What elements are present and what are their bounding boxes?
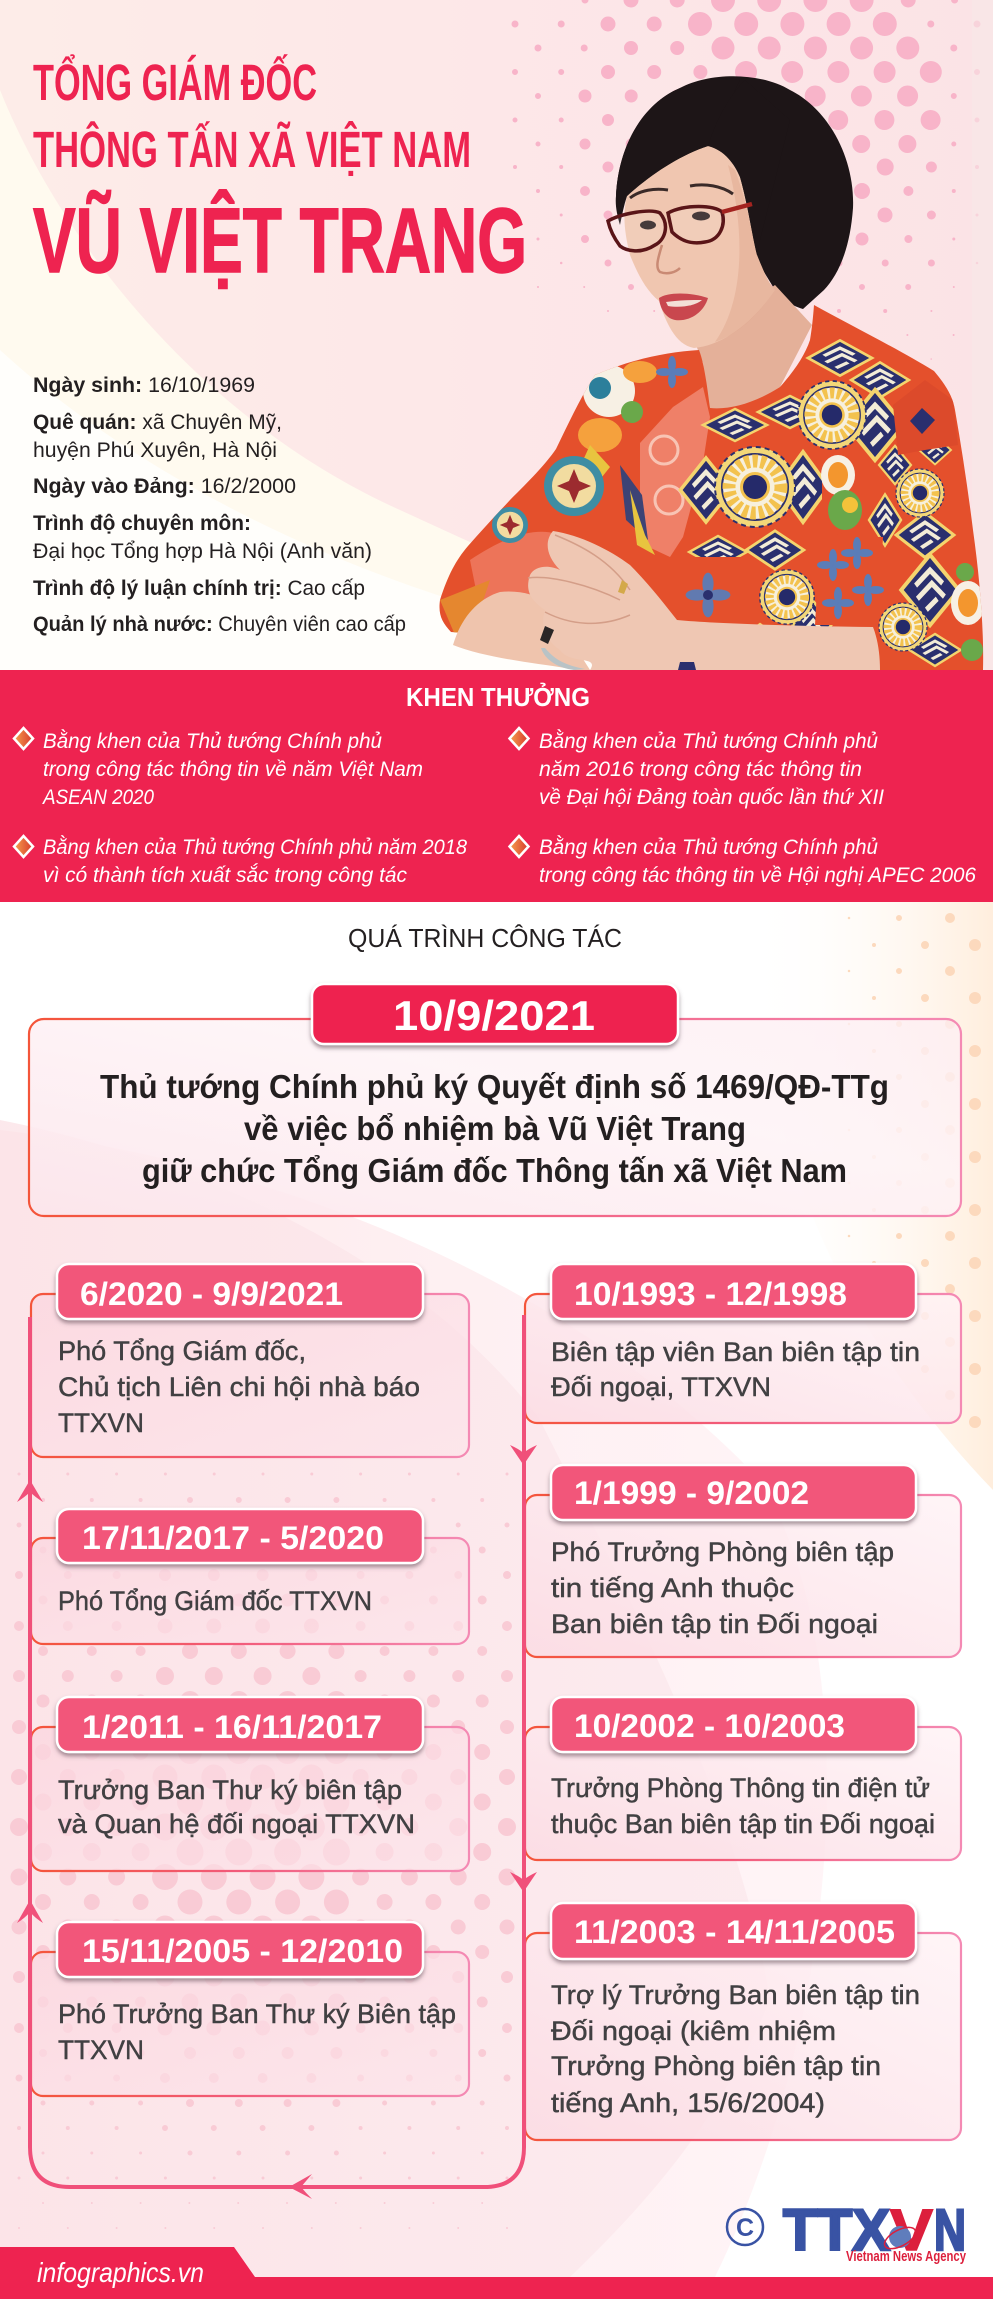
footer band: [0, 2247, 993, 2299]
decorative dots: timeline halftone: [19, 1474, 510, 2228]
panel: timeline left 3: và Quan hệ đối ngoại TTXVN: [58, 1809, 415, 1839]
logo: ttxvn: V: [890, 2198, 933, 2263]
navy and yellow diamond field: [703, 409, 767, 441]
milestone text: Thủ tướng Chính phủ ký Quyết định số 1469/QĐ-TTg: [100, 1068, 889, 1105]
panel: timeline left 3: [31, 1697, 469, 1871]
panel: timeline right 3: 10/2002 - 10/2003: [574, 1708, 845, 1744]
nose: [657, 245, 680, 273]
panel: timeline left 4: TTXVN: [58, 2035, 144, 2065]
panel: timeline left 2: [31, 1509, 469, 1644]
heading: khen thuong: KHEN THƯỞNG: [406, 681, 590, 712]
award list: [41, 730, 976, 887]
personal info: Quản lý nhà nước: Chuyên viên cao cấp: [33, 613, 406, 636]
award list: Bằng khen của Thủ tướng Chính phủ: [43, 730, 382, 753]
panel: khen thuong: [0, 670, 993, 902]
award diamonds: [14, 728, 528, 857]
milestone date badge: 10/9/2021: [393, 992, 595, 1039]
personal info: Ngày sinh: 16/10/1969: [33, 374, 255, 397]
decorative dots: top right: [515, 0, 993, 359]
panel: timeline right 2: tin tiếng Anh thuộc: [551, 1573, 794, 1603]
panel: timeline left 4: 15/11/2005 - 12/2010: [82, 1933, 403, 1969]
copyright mark: [727, 2209, 763, 2245]
personal info: huyện Phú Xuyên, Hà Nội: [33, 439, 277, 462]
panel: timeline left 1: [31, 1264, 469, 1457]
milestone text: [100, 1068, 889, 1189]
rosette motifs: [715, 447, 795, 527]
panel: timeline left 3: 1/2011 - 16/11/2017: [82, 1709, 382, 1745]
panel: timeline left 2: 17/11/2017 - 5/2020: [82, 1520, 384, 1556]
panel: timeline left 2: Phó Tổng Giám đốc TTXVN: [58, 1586, 372, 1616]
panel: timeline right 4: [525, 1903, 961, 2140]
arrow up: left 1: [17, 1480, 43, 1502]
blouse: [430, 300, 993, 675]
watch: [540, 626, 585, 670]
award list: trong công tác thông tin về Hội nghị APEC 2006: [539, 864, 976, 887]
award list: năm 2016 trong công tác thông tin: [539, 758, 862, 781]
panel: timeline right 2: [525, 1465, 961, 1657]
award list: về Đại hội Đảng toàn quốc lần thứ XII: [539, 786, 884, 809]
panel: timeline right 1: Đối ngoại, TTXVN: [551, 1372, 771, 1402]
panel: timeline left 3: Trưởng Ban Thư ký biên tập: [58, 1775, 402, 1805]
blouse hem fragment: [678, 662, 696, 670]
personal info: Ngày vào Đảng: 16/2/2000: [33, 475, 296, 498]
neck: [694, 285, 812, 410]
panel: timeline right 4: Trợ lý Trưởng Ban biên tập tin: [551, 1980, 920, 2010]
arrow up: left 2: [17, 1900, 43, 1923]
personal info: Trình độ chuyên môn:: [33, 512, 251, 535]
hands and forearms: [453, 592, 590, 670]
milestone date badge: [312, 984, 678, 1044]
panel: timeline right 3: [525, 1697, 961, 1860]
title: VŨ VIỆT TRANG: [33, 189, 527, 292]
timeline flow loop with arrows: [17, 1315, 537, 2199]
award list: vì có thành tích xuất sắc trong công tác: [43, 864, 407, 887]
panel: timeline left 1: Phó Tổng Giám đốc,: [58, 1336, 306, 1366]
hair fringe: [616, 78, 740, 225]
panel: timeline right 2: 1/1999 - 9/2002: [574, 1475, 809, 1511]
copyright mark: C: [736, 2214, 754, 2242]
award list: trong công tác thông tin về năm Việt Nam: [43, 758, 423, 781]
arrow down: right 1: [510, 1445, 537, 1465]
personal info: Trình độ lý luận chính trị: Cao cấp: [33, 577, 365, 600]
logo: ttxvn: N: [934, 2198, 966, 2263]
panel: timeline left 4: [31, 1922, 469, 2096]
personal info: [33, 374, 406, 636]
panel: timeline right 4: tiếng Anh, 15/6/2004): [551, 2088, 825, 2118]
panel: timeline right 3: thuộc Ban biên tập tin Đối ngoại: [551, 1809, 935, 1839]
right edge fade: [972, 0, 993, 670]
panel: milestone 10/9/2021: [29, 984, 961, 1216]
portrait photo: [430, 76, 993, 675]
panel: timeline left 4: Phó Trưởng Ban Thư ký Biên tập: [58, 1999, 456, 2029]
face: [624, 146, 775, 348]
heading: qua trinh cong tac: QUÁ TRÌNH CÔNG TÁC: [348, 923, 622, 953]
panel: timeline right 4: Đối ngoại (kiêm nhiệm: [551, 2016, 836, 2046]
hair back: [616, 76, 853, 309]
panel: timeline right 1: [525, 1264, 961, 1423]
award list: ASEAN 2020: [41, 786, 154, 809]
salmon textured panel: [640, 387, 710, 557]
title: [33, 53, 527, 292]
panel: timeline right 4: Trưởng Phòng biên tập tin: [551, 2051, 881, 2081]
arrow down: right 2: [510, 1872, 537, 1892]
milestone text: giữ chức Tổng Giám đốc Thông tấn xã Việt Nam: [142, 1152, 847, 1189]
panel: timeline left 1: 6/2020 - 9/9/2021: [80, 1276, 343, 1312]
floral motifs: [583, 365, 635, 417]
logo: ttxvn: [727, 2198, 966, 2265]
award list: Bằng khen của Thủ tướng Chính phủ năm 2018: [43, 836, 467, 859]
website: infographics.vn: [37, 2257, 204, 2288]
personal info: Đại học Tổng hợp Hà Nội (Anh văn): [33, 540, 372, 563]
title: THÔNG TẤN XÃ VIỆT NAM: [33, 120, 471, 178]
award list: Bằng khen của Thủ tướng Chính phủ: [539, 836, 878, 859]
arrow left: bottom: [289, 2174, 312, 2199]
mouth: [659, 294, 708, 320]
panel: timeline left 1: Chủ tịch Liên chi hội nhà báo: [58, 1372, 420, 1402]
glasses: [608, 204, 752, 251]
panel: timeline right 3: Trưởng Phòng Thông tin điện tử: [551, 1773, 930, 1803]
panel: timeline right 2: Ban biên tập tin Đối ngoại: [551, 1609, 878, 1639]
award list: Bằng khen của Thủ tướng Chính phủ: [539, 730, 878, 753]
eyes: [640, 212, 710, 230]
decorative dots: peach columns: [849, 918, 975, 1430]
milestone text: về việc bổ nhiệm bà Vũ Việt Trang: [244, 1110, 746, 1147]
panel: timeline right 1: 10/1993 - 12/1998: [574, 1276, 847, 1312]
title: TỔNG GIÁM ĐỐC: [33, 53, 317, 111]
panel: timeline left 1: TTXVN: [58, 1408, 144, 1438]
panel: timeline right 2: Phó Trưởng Phòng biên tập: [551, 1537, 894, 1567]
eyebrows: [630, 185, 733, 198]
logo: ttxvn: TTX: [783, 2198, 890, 2263]
orange flowers and red panels: [822, 482, 828, 499]
panel: timeline right 1: Biên tập viên Ban biên tập tin: [551, 1337, 920, 1367]
panel: timeline right 4: 11/2003 - 14/11/2005: [574, 1914, 895, 1950]
personal info: Quê quán: xã Chuyên Mỹ,: [33, 411, 282, 434]
